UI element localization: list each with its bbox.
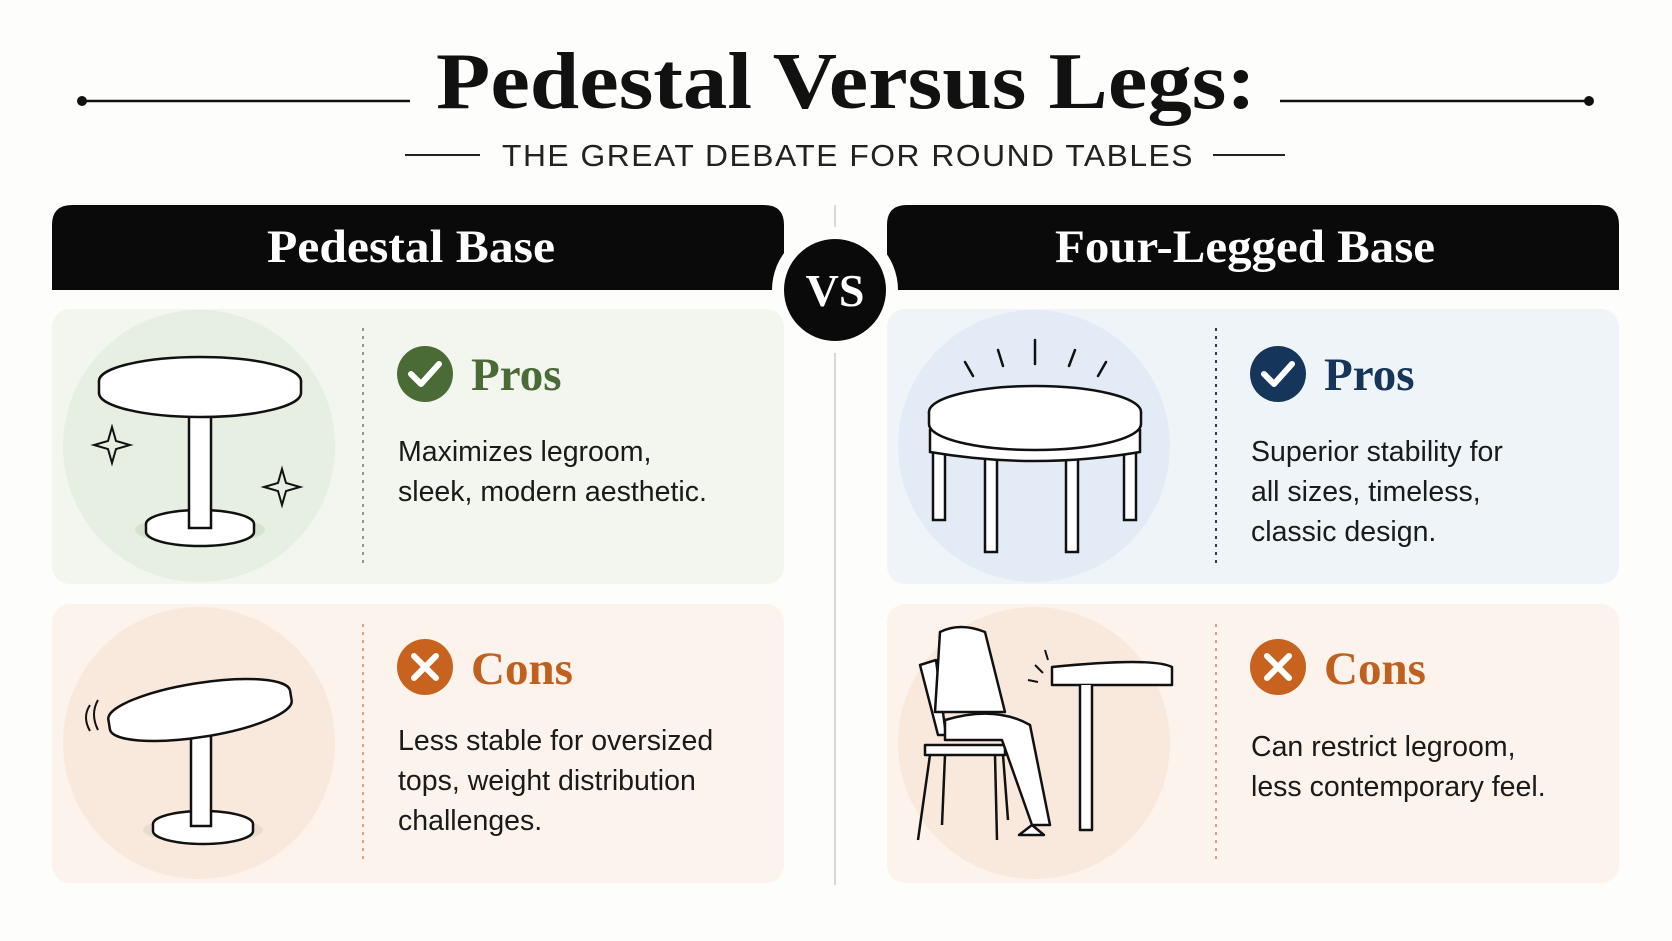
heading: cons: Cons [1324,643,1426,695]
heading: pros: Pros [471,349,562,401]
panel: four-legged pros [887,309,1619,584]
icon: pedestal table with sparkles [63,310,335,582]
icon: person knees hitting table leg [898,607,1172,879]
subtitle: THE GREAT DEBATE FOR ROUND TABLES [502,138,1194,173]
text: four-legged pros: Superior stability for [1251,436,1503,468]
text: pedestal cons: challenges. [398,805,542,837]
header: pedestal base: Pedestal Base [267,221,555,273]
vs badge: VS [806,265,864,316]
panel: four-legged cons [887,604,1619,883]
icon: navy check [1250,346,1306,402]
icon: green check [397,346,453,402]
text: pedestal pros: sleek, modern aesthetic. [398,476,707,508]
heading: cons: Cons [471,643,573,695]
vs badge [772,227,898,353]
text: pedestal pros: Maximizes legroom, [398,436,651,468]
heading: pros: Pros [1324,349,1415,401]
header: four-legged base [887,205,1619,290]
text: four-legged pros: all sizes, timeless, [1251,476,1481,508]
icon: orange x [397,639,453,695]
icon: four-legged table [898,310,1170,582]
text: pedestal cons: tops, weight distribution [398,765,696,797]
panel: pedestal pros [52,309,784,584]
header: four-legged base: Four-Legged Base [1055,221,1435,273]
text: four-legged cons: Can restrict legroom, [1251,731,1516,763]
text: pedestal cons: Less stable for oversized [398,725,713,757]
header: pedestal base [52,205,784,290]
icon: orange x [1250,639,1306,695]
panel: pedestal cons [52,604,784,883]
title: Pedestal Versus Legs: [436,38,1256,126]
text: four-legged cons: less contemporary feel. [1251,771,1546,803]
icon: wobbling pedestal table [63,607,335,879]
title [77,38,1594,126]
text: four-legged pros: classic design. [1251,516,1436,548]
